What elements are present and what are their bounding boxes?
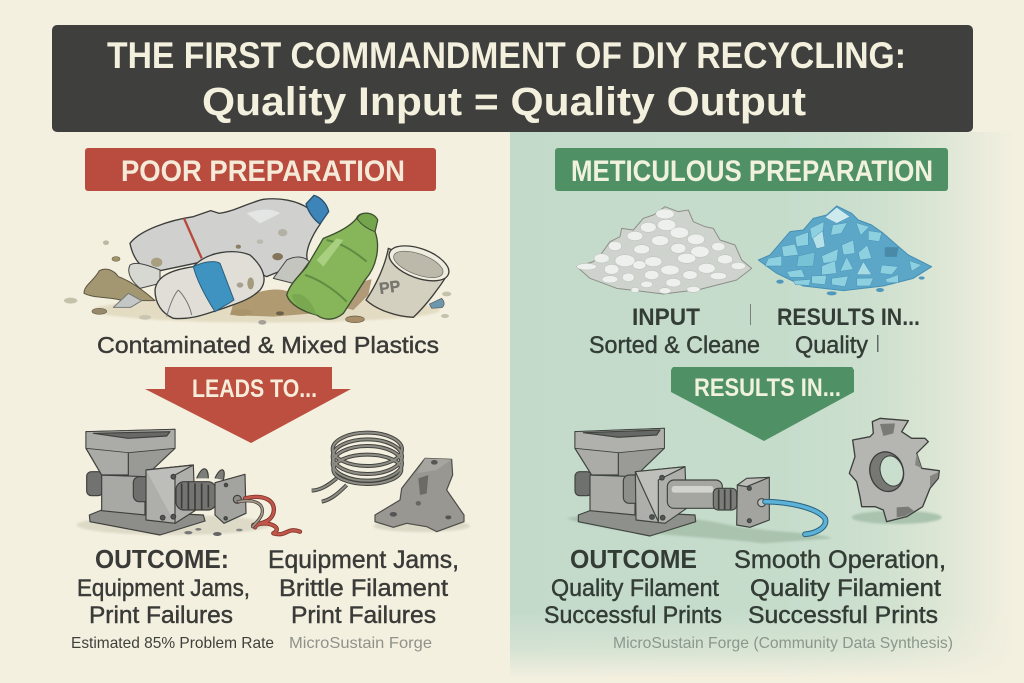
big white bottle: [130, 199, 321, 277]
outcome text left: Equipment Jams,: [77, 575, 250, 602]
outcome text right: Quality Filament: [551, 575, 719, 602]
results label: RESULTS IN...: [777, 304, 920, 331]
outcome text right: Successful Prints: [544, 602, 722, 629]
success list text: [734, 546, 946, 629]
failure list text: Print Failures: [291, 602, 436, 629]
success list text: Quality Filamient: [750, 575, 941, 602]
arrow: leads to: [145, 367, 351, 443]
rolled white bottle: [155, 252, 264, 319]
title line 2: Quality Input = Quality Output: [202, 80, 806, 124]
PP cup: [366, 248, 448, 317]
results label: [750, 304, 920, 359]
outcome text right: OUTCOME: [570, 546, 697, 574]
outcome text left: [77, 546, 250, 629]
failure list text: Equipment Jams,: [268, 546, 459, 574]
illustration: contaminated plastics: [64, 195, 453, 325]
illustration: brittle filament coil and broken part: [312, 433, 470, 532]
outcome text right: [544, 546, 722, 629]
panel: right background: [510, 132, 1020, 680]
input label: INPUT: [632, 304, 700, 331]
heading banner: poor preparation: [85, 148, 436, 191]
illustration: contaminated plastics: PP: [378, 278, 402, 298]
heading banner: meticulous preparation: [555, 148, 948, 191]
blue cap: [306, 195, 329, 224]
results label: Quality: [795, 332, 868, 359]
arrow: leads to: LEADS TO...: [192, 375, 317, 403]
illustration: jammed extruder: [77, 429, 300, 536]
green bottle: [287, 213, 378, 319]
arrow: results in: RESULTS IN...: [694, 374, 841, 402]
heading banner: poor preparation: POOR PREPARATION: [121, 155, 405, 188]
statistic: problem rate: Estimated 85% Problem Rate: [71, 635, 274, 652]
arrow: results in: [671, 367, 854, 441]
title bar: [52, 25, 973, 132]
illustration: smooth extruder: [567, 428, 832, 543]
source: left: MicroSustain Forge: [289, 635, 432, 652]
outcome text left: OUTCOME:: [95, 546, 229, 574]
heading banner: meticulous preparation: METICULOUS PREPARATION: [571, 155, 933, 188]
failure list text: Brittle Filament: [279, 575, 448, 602]
outcome text left: Print Failures: [89, 602, 233, 629]
caption: contaminated and mixed plastics: Contaminated & Mixed Plastics: [97, 332, 439, 358]
illustration: white flake pile: [577, 207, 752, 294]
illustration: blue flake pile: [758, 206, 932, 295]
input label: [589, 304, 760, 359]
success list text: Smooth Operation,: [734, 546, 946, 574]
source: right: MicroSustain Forge (Community Data Synthesis): [613, 635, 953, 652]
title line 1: THE FIRST COMMANDMENT OF DIY RECYCLING:: [107, 35, 906, 76]
failure list text: [268, 546, 459, 629]
success list text: Successful Prints: [748, 602, 938, 629]
panel: poor preparation: [64, 148, 470, 652]
input label: Sorted & Cleane: [589, 332, 760, 359]
illustration: quality gear: [849, 418, 942, 524]
panel: meticulous preparation: [544, 148, 953, 652]
